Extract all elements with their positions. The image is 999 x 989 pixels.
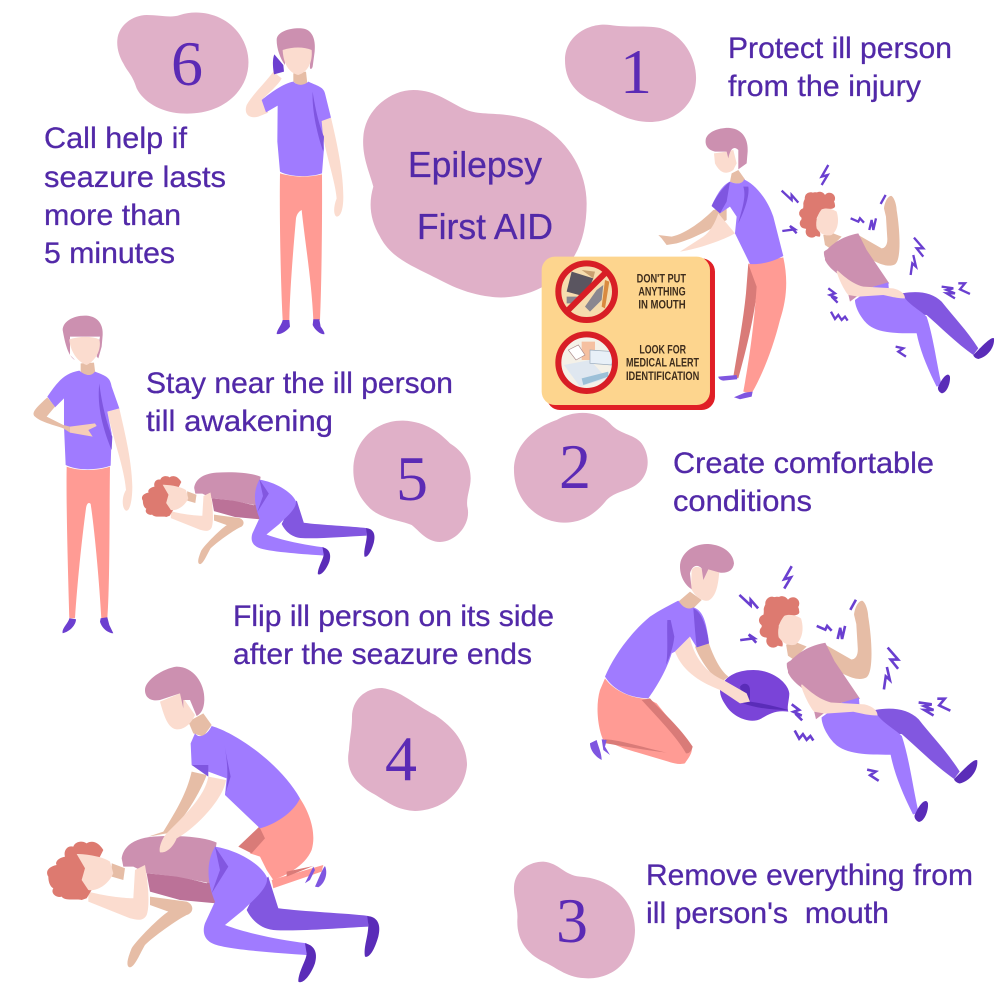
sign text: ANYTHING	[638, 285, 686, 299]
step 3 text	[646, 859, 973, 930]
step 6 number badge: 6	[171, 28, 203, 99]
figure: standing helper	[658, 128, 786, 399]
figure: person waiting nearby	[34, 316, 132, 633]
step 1 text: from the injury	[728, 70, 921, 103]
sign text: IN MOUTH	[638, 298, 686, 312]
step 5 text	[146, 367, 453, 438]
step 4 text: after the seazure ends	[233, 638, 532, 671]
figure: person lying on side, large	[47, 777, 379, 982]
figure: person on the phone	[246, 28, 343, 334]
step 3 text: ill person's mouth	[646, 897, 889, 930]
step 5 number badge: 5	[396, 443, 428, 514]
first aid sign	[542, 257, 715, 410]
step 4 number badge: 4	[385, 723, 417, 794]
sign text: MEDICAL ALERT	[626, 356, 699, 370]
step 3 text: Remove everything from	[646, 859, 973, 892]
step 6 text: Call help if	[44, 122, 188, 155]
figure: person lying on side, small	[142, 472, 375, 575]
step 2 text: Create comfortable	[673, 447, 934, 480]
step 4 text: Flip ill person on its side	[233, 600, 554, 633]
step 6 text: 5 minutes	[44, 237, 175, 270]
step 2 text	[673, 447, 934, 518]
sign text: DON'T PUT	[637, 271, 687, 285]
blob: title	[363, 90, 587, 297]
step 5 text: till awakening	[146, 405, 333, 438]
sign text: IDENTIFICATION	[626, 369, 699, 383]
step 6 text	[44, 122, 226, 270]
step 6 text: more than	[44, 199, 181, 232]
title	[408, 144, 553, 247]
step 5 text: Stay near the ill person	[146, 367, 453, 400]
title: Epilepsy	[408, 144, 542, 185]
step 2 number badge: 2	[559, 431, 591, 502]
step 5 number badge	[353, 421, 471, 542]
step 1 text	[728, 32, 952, 103]
step 4 text	[233, 600, 554, 671]
icon: do not put objects in mouth	[558, 263, 615, 320]
step 6 number badge	[117, 12, 248, 114]
figure: person having a seizure with pillow	[739, 566, 977, 822]
title: First AID	[417, 206, 553, 247]
step 4 number badge	[348, 688, 467, 811]
pillow	[720, 670, 789, 721]
figure: person having a seizure	[782, 165, 994, 393]
step 3 number badge: 3	[556, 885, 588, 956]
step 1 number badge	[565, 25, 696, 122]
sign text: LOOK FOR	[639, 342, 686, 356]
step 3 number badge	[514, 862, 635, 978]
step 1 number badge: 1	[620, 36, 652, 107]
figure: kneeling helper with pillow	[590, 544, 789, 764]
step 2 text: conditions	[673, 485, 812, 518]
figure: helper flipping person on side	[145, 667, 326, 888]
step 6 text: seazure lasts	[44, 161, 226, 194]
sign text	[626, 271, 699, 383]
step 1 text: Protect ill person	[728, 32, 952, 65]
step 2 number badge	[514, 413, 648, 523]
icon: medical alert identification	[558, 334, 615, 391]
